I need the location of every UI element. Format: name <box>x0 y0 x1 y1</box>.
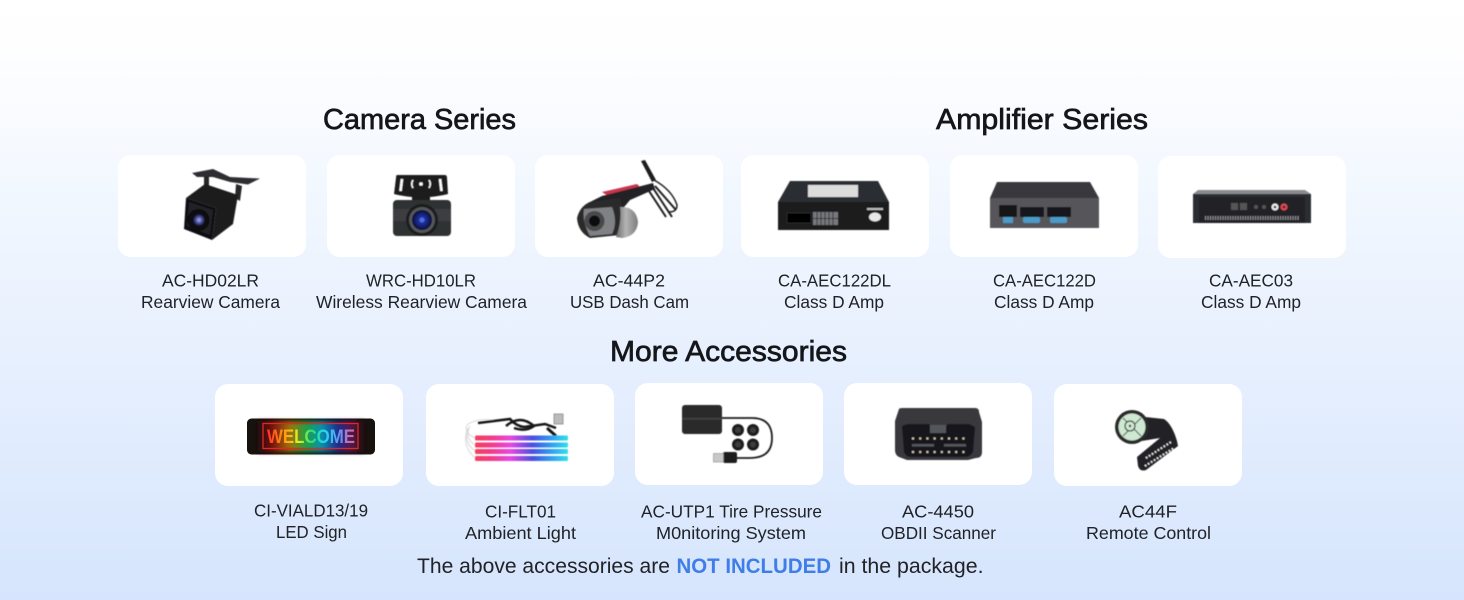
icon: ambient light strips <box>466 414 568 461</box>
label: AC-UTP1 Tire Pressure <box>641 502 822 522</box>
label <box>141 270 280 312</box>
label: CI-FLT01 <box>485 502 556 522</box>
label <box>1201 270 1301 312</box>
label: M0nitoring System <box>656 523 806 543</box>
label: OBDII Scanner <box>881 523 996 543</box>
product: AC44F Remote Control <box>1054 384 1242 543</box>
icon: LED sign: WELCOME <box>267 427 355 448</box>
product: WRC-HD10LR Wireless Rearview Camera <box>316 155 527 312</box>
icon: amplifier <box>1193 190 1311 223</box>
product: CI-VIALD13/19 LED Sign <box>215 384 403 542</box>
product: CA-AEC03 Class D Amp <box>1158 156 1346 312</box>
heading: Amplifier Series: Amplifier Series <box>936 104 1148 136</box>
heading: More Accessories: More Accessories <box>610 336 847 368</box>
label: AC-4450 <box>902 502 974 522</box>
icon: LED sign <box>247 418 375 454</box>
label <box>778 270 891 312</box>
label: AC44F <box>1119 502 1177 522</box>
label: CA-AEC122DL <box>778 270 891 290</box>
label <box>570 270 689 312</box>
icon: tire pressure monitor <box>682 405 772 463</box>
label: Rearview Camera <box>141 292 280 312</box>
icon: wireless camera <box>393 175 451 236</box>
label <box>254 500 368 542</box>
label <box>993 270 1096 312</box>
product: AC-4450 OBDII Scanner <box>844 383 1032 543</box>
label: Class D Amp <box>994 292 1094 312</box>
heading: Camera Series: Camera Series <box>323 104 516 136</box>
footer note: NOT INCLUDED <box>676 555 831 578</box>
label: AC-44P2 <box>593 270 665 290</box>
label: AC-HD02LR <box>162 270 259 290</box>
label: Class D Amp <box>1201 292 1301 312</box>
label: Class D Amp <box>784 292 884 312</box>
label <box>641 502 822 543</box>
label: Wireless Rearview Camera <box>316 292 527 312</box>
footer note <box>417 555 984 578</box>
label: CA-AEC122D <box>993 270 1096 290</box>
label <box>465 502 576 543</box>
label <box>316 270 527 312</box>
icon: OBDII scanner <box>895 408 982 460</box>
label: USB Dash Cam <box>570 292 689 312</box>
icon: rearview camera <box>184 169 260 240</box>
label: WRC-HD10LR <box>366 270 476 290</box>
icon: amplifier <box>990 182 1099 228</box>
product: CI-FLT01 Ambient Light <box>426 384 614 543</box>
product: AC-UTP1 Tire Pressure Monitoring System <box>635 383 823 543</box>
label: LED Sign <box>276 522 347 542</box>
footer note: The above accessories are <box>417 555 670 578</box>
label: CI-VIALD13/19 <box>254 500 368 520</box>
label <box>881 502 996 543</box>
label: Ambient Light <box>465 523 576 543</box>
icon: steering wheel remote <box>1115 410 1178 470</box>
label: Remote Control <box>1086 523 1211 543</box>
product: AC-44P2 USB Dash Cam <box>535 155 723 312</box>
footer note: in the package. <box>839 555 984 578</box>
product: AC-HD02LR Rearview Camera <box>118 155 306 312</box>
label: CA-AEC03 <box>1209 270 1293 290</box>
product: CA-AEC122DL Class D Amp <box>741 155 929 312</box>
product: CA-AEC122D Class D Amp <box>950 155 1138 312</box>
label <box>1086 502 1211 543</box>
icon: dash cam <box>577 160 677 238</box>
icon: amplifier <box>778 181 889 230</box>
